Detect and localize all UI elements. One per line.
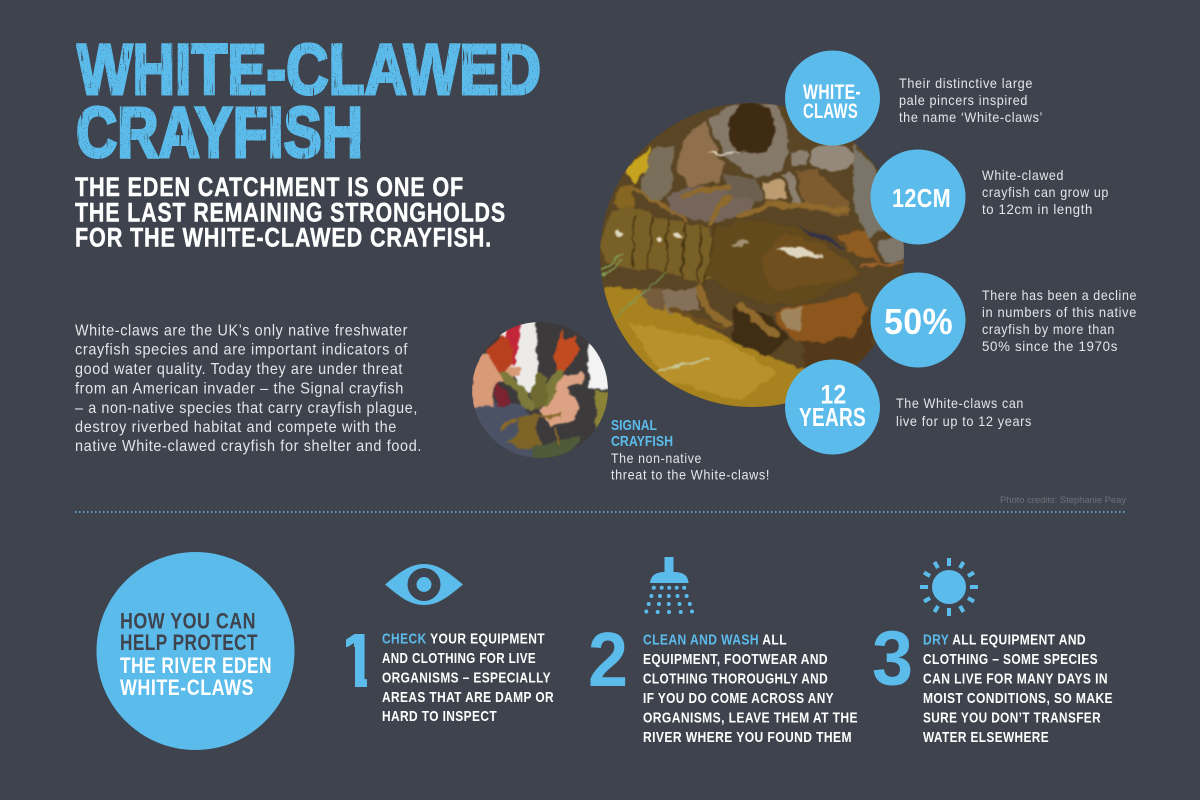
step 3: MOIST CONDITIONS, SO MAKE [923, 690, 1113, 707]
step 1: AREAS THAT ARE DAMP OR [382, 689, 554, 706]
step 1: AND CLOTHING FOR LIVE [382, 650, 536, 667]
stat: 12 years [785, 360, 880, 454]
stat text: white-claws: Their distinctive large [899, 75, 1033, 91]
subtitle: THE LAST REMAINING STRONGHOLDS [75, 198, 506, 228]
step 3 [872, 616, 1113, 746]
yellow leaf [625, 145, 650, 183]
stat text: 12 years [896, 395, 1032, 429]
stat text: 50%: There has been a decline [982, 287, 1137, 303]
tail [602, 207, 718, 283]
title [76, 31, 541, 173]
callout: how you can help: THE RIVER EDEN [120, 653, 272, 678]
stat text: 50%: crayfish by more than [982, 321, 1115, 337]
stat text: white-claws: pale pincers inspired [899, 92, 1028, 108]
step 2: CLEAN AND WASH ALL [643, 632, 787, 648]
subtitle: FOR THE WHITE-CLAWED CRAYFISH. [75, 222, 492, 252]
body text [75, 322, 422, 455]
stat: 12 years: YEARS [799, 402, 866, 432]
callout: how you can help [96, 552, 294, 750]
signal crayfish caption: CRAYFISH [611, 433, 673, 450]
highlights [614, 152, 823, 257]
step 3: SURE YOU DON’T TRANSFER [923, 710, 1101, 726]
stat: 12cm [870, 150, 966, 244]
body text: – a non-native species that carry crayfish plague, [75, 400, 418, 417]
stat text: 50% [982, 287, 1137, 354]
step 2: 2 [588, 617, 628, 703]
signal crayfish caption: The non-native [611, 450, 702, 466]
step 1 [346, 634, 554, 721]
signal crayfish caption [611, 417, 770, 482]
step 3: CLOTHING – SOME SPECIES [923, 651, 1098, 668]
body text: native White-clawed crayfish for shelter and food. [75, 438, 422, 455]
step 3: DRY ALL EQUIPMENT AND [923, 632, 1086, 648]
subtitle: THE EDEN CATCHMENT IS ONE OF [75, 172, 464, 202]
claws [486, 333, 513, 375]
stat text: white-claws [899, 75, 1043, 125]
stat text: 50%: in numbers of this native [982, 304, 1137, 320]
step 2: EQUIPMENT, FOOTWEAR AND [643, 651, 828, 668]
step 2: ORGANISMS, LEAVE THEM AT THE [643, 710, 858, 726]
step 2 [588, 617, 858, 746]
stat: 50%: 50% [884, 301, 953, 342]
step 1: ORGANISMS – ESPECIALLY [382, 670, 551, 686]
photo credit: Photo credits: Stephanie Peay [1000, 495, 1127, 505]
body text: from an American invader – the Signal crayfish [75, 380, 404, 398]
step 2: RIVER WHERE YOU FOUND THEM [643, 729, 852, 746]
icon: sun [920, 558, 978, 616]
stat text: 12cm: crayfish can grow up [982, 184, 1109, 200]
step 3: CAN LIVE FOR MANY DAYS IN [923, 670, 1108, 688]
title: CRAYFISH [76, 94, 363, 173]
photo: white-clawed crayfish [600, 102, 907, 410]
stat text: 50%: 50% since the 1970s [982, 338, 1118, 354]
stat: 50% [870, 272, 966, 368]
step 1: HARD TO INSPECT [382, 708, 497, 725]
title: WHITE-CLAWED [77, 31, 541, 110]
body text: crayfish species and are important indicators of [75, 342, 408, 358]
step 1: CHECK YOUR EQUIPMENT [382, 630, 545, 648]
icon: shower [644, 557, 694, 614]
legs and antennae [633, 187, 903, 335]
body text: White-claws are the UK’s only native freshwater [75, 322, 408, 340]
photo: signal crayfish [470, 320, 610, 460]
stat text: 12cm: to 12cm in length [982, 201, 1093, 217]
stat text: 12cm [982, 167, 1109, 217]
signal crayfish caption: threat to the White-claws! [611, 466, 770, 482]
grass blades [602, 255, 708, 372]
body text: good water quality. Today they are under threat [75, 361, 403, 378]
step 3: WATER ELSEWHERE [923, 729, 1049, 746]
step 2: CLOTHING THOROUGHLY AND [643, 670, 828, 688]
body text: destroy riverbed habitat and compete with the [75, 419, 397, 436]
stat text: white-claws: the name ‘White-claws’ [899, 109, 1043, 125]
stones and gravel [603, 102, 907, 410]
hands [472, 353, 522, 408]
stat text: 12 years: The White-claws can [896, 395, 1024, 411]
carapace [707, 220, 862, 303]
claw [773, 292, 868, 342]
stat: 12cm: 12CM [892, 183, 951, 213]
stat: white-claws [785, 50, 880, 146]
stat: white-claws: WHITE- [803, 81, 861, 104]
crayfish [503, 372, 560, 408]
callout: how you can help: WHITE-CLAWS [120, 675, 254, 700]
step 1: 1 [336, 618, 379, 704]
stat: 12 years: 12 [820, 380, 846, 410]
callout: how you can help: HOW YOU CAN [120, 608, 256, 634]
stat: white-claws: CLAWS [803, 100, 858, 123]
stat text: 12 years: live for up to 12 years [896, 413, 1032, 429]
stat text: 12cm: White-clawed [982, 167, 1064, 183]
step 2: IF YOU DO COME ACROSS ANY [643, 690, 834, 707]
signal crayfish caption: SIGNAL [611, 417, 657, 434]
clothing [474, 402, 534, 458]
subtitle [75, 172, 506, 252]
callout: how you can help: HELP PROTECT [120, 630, 258, 655]
step 3: 3 [872, 616, 913, 702]
icon: eye [385, 564, 463, 605]
